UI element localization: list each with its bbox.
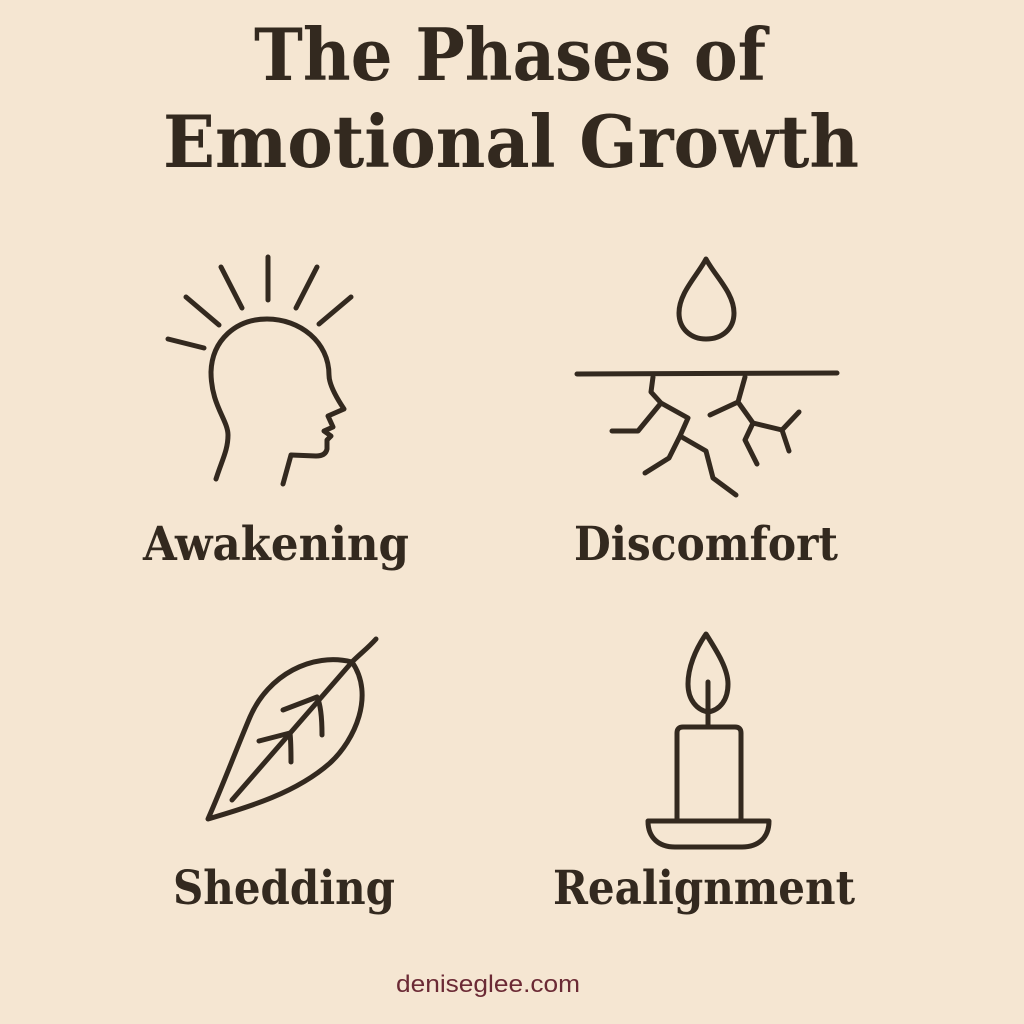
title: The Phases of [254, 12, 770, 97]
title [163, 12, 859, 184]
icon: leaf [208, 639, 376, 819]
label: Awakening: Awakening [142, 517, 409, 572]
icon: water drop over cracked ground [577, 259, 837, 495]
label: Discomfort: Discomfort [574, 517, 838, 572]
label: Shedding: Shedding [173, 861, 395, 916]
title: Emotional Growth [163, 99, 859, 184]
icon: head with rays [168, 257, 351, 484]
label: Realignment: Realignment [553, 861, 855, 916]
footer website: deniseglee.com [396, 971, 580, 998]
icon: candle [648, 634, 769, 847]
